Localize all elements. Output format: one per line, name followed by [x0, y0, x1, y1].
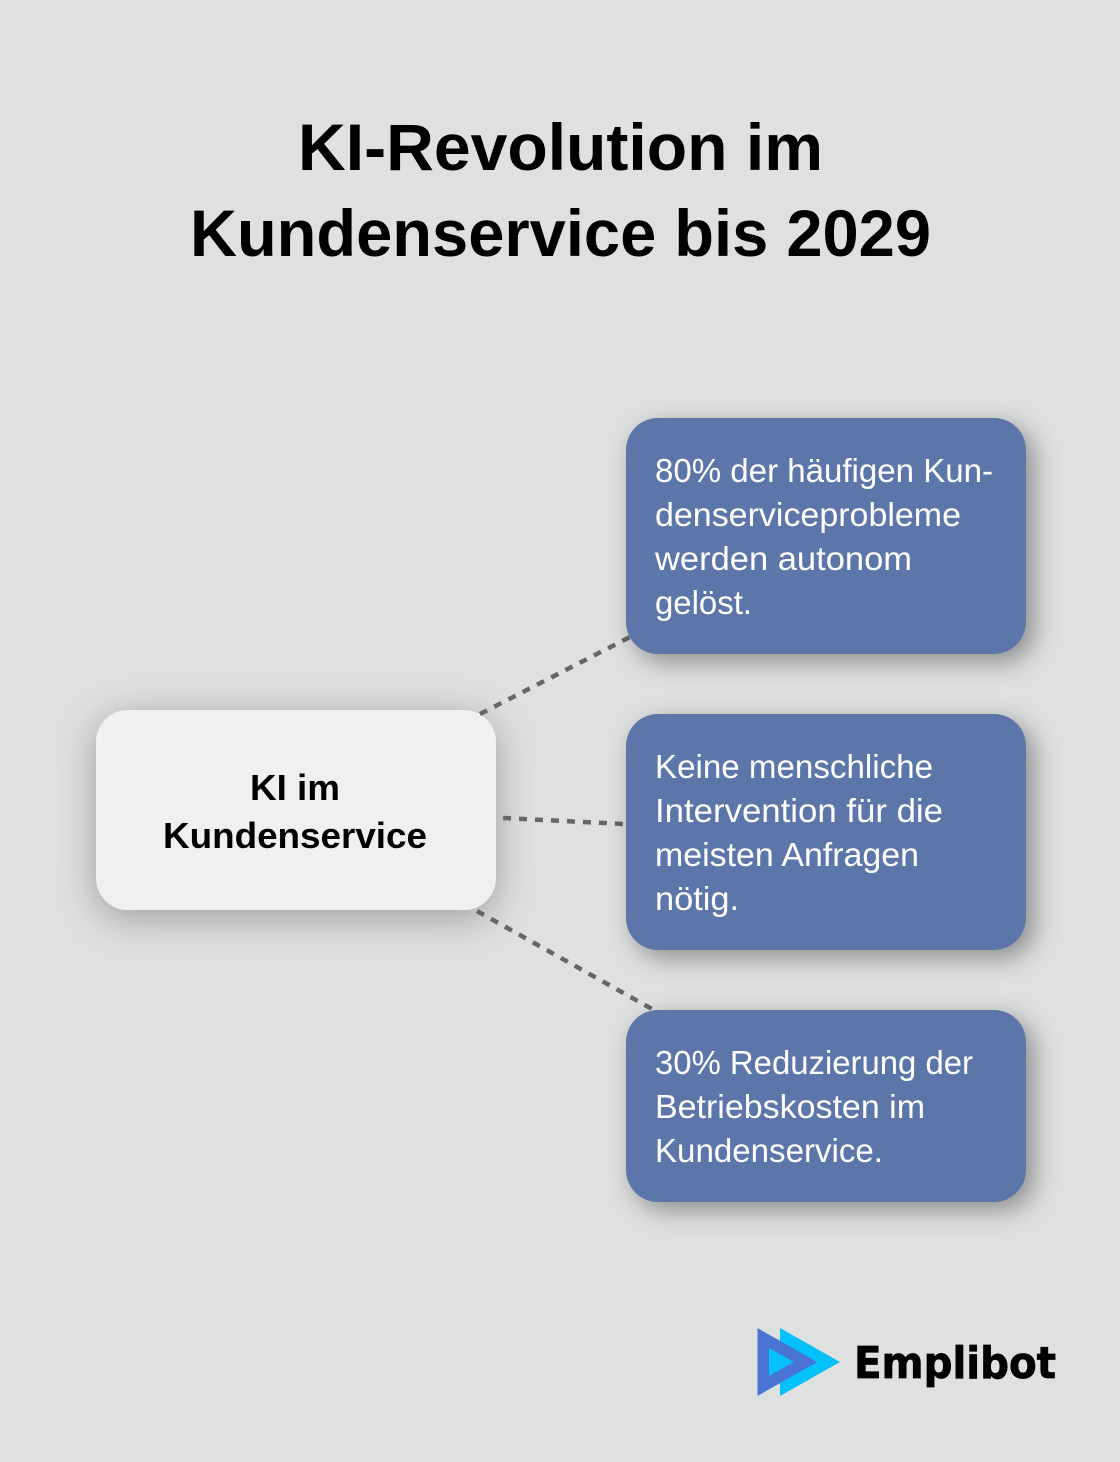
panel: Keine menschliche Intervention: meisten Anfragen [655, 836, 919, 873]
title: Kundenservice bis 2029 [190, 196, 931, 270]
logo wordmark: Emplibot [854, 1338, 1056, 1389]
panel: Keine menschliche Intervention: Intervention für die [655, 792, 943, 829]
panel: KI im Kundenservice: KI im [250, 767, 340, 808]
panel: KI im Kundenservice [96, 710, 496, 910]
panel: 30% Reduzierung: Betriebskosten im [655, 1088, 925, 1125]
panel: KI im Kundenservice: Kundenservice [163, 815, 427, 856]
panel: Keine menschliche Intervention: Keine menschliche [655, 748, 933, 785]
panel: 80% der Kundenserviceprobleme: gelöst. [655, 584, 752, 621]
panel: 30% Reduzierung: 30% Reduzierung der [655, 1044, 973, 1081]
connector: center to third box [477, 911, 652, 1009]
panel: 80% der Kundenserviceprobleme: werden autonom [654, 540, 912, 577]
panel: 30% Reduzierung: Kundenservice. [655, 1132, 883, 1169]
panel: 80% der Kundenserviceprobleme: 80% der häufigen Kun- [655, 452, 993, 489]
logo: Emplibot [758, 1328, 1056, 1396]
icon: play triangles [758, 1328, 840, 1396]
connector: center to second box [503, 818, 624, 824]
panel: Keine menschliche Intervention [626, 714, 1026, 950]
panel: 80% der Kundenserviceprobleme: denserviceprobleme [655, 496, 961, 533]
title: KI-Revolution im [298, 110, 823, 184]
connector: center to first box [480, 637, 630, 714]
panel: 80% der Kundenserviceprobleme [626, 418, 1026, 654]
panel: 30% Reduzierung [626, 1010, 1026, 1202]
panel: Keine menschliche Intervention: nötig. [655, 880, 739, 917]
title [190, 110, 931, 270]
